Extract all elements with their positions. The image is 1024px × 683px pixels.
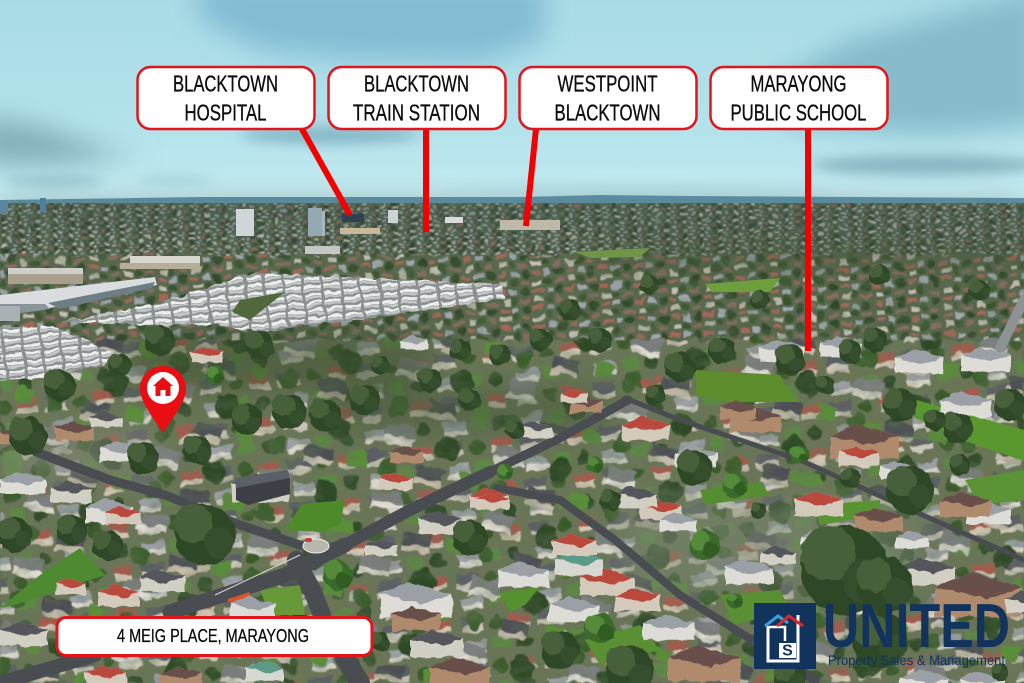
callout: Westpoint Blacktown: BLACKTOWN [554,100,660,126]
leader line: Blacktown Hospital [302,129,350,215]
location pin: red map marker with house icon [140,366,186,433]
callout: Blacktown Hospital [138,67,314,129]
logo: United Property Sales and Management [754,592,1010,669]
callout: Blacktown Train Station: BLACKTOWN [364,70,469,96]
leader line: Blacktown Train Station [423,129,429,232]
logo mark [754,603,816,669]
flats building [235,470,290,505]
background photo: suburban ground [0,203,1024,683]
callout: Blacktown Train Station [328,67,506,129]
callout: Blacktown Hospital: BLACKTOWN [173,70,278,96]
address label [57,618,372,656]
callout: Westpoint Blacktown [520,67,696,129]
city skyline [0,198,560,284]
leader line: Westpoint Blacktown [526,129,536,226]
warehouse and townhouse estate [0,273,505,380]
address label: 4 MEIG PLACE, MARAYONG [117,625,309,646]
green sports fields and lawns [0,248,1024,665]
leader line: Marayong Public School [805,129,811,351]
trees [0,265,1024,683]
background photo: sky [0,0,1024,206]
callout: Blacktown Hospital: HOSPITAL [184,100,266,126]
roundabout [215,538,329,601]
houses [0,336,1024,683]
callout: Westpoint Blacktown: WESTPOINT [558,70,658,96]
callout: Blacktown Train Station: TRAIN STATION [353,100,480,126]
callout: Marayong Public School: PUBLIC SCHOOL [730,100,866,126]
roads [0,300,1024,683]
callout: Marayong Public School [710,67,888,129]
logo mark: S [782,642,793,660]
logo tagline: Property Sales & Management [828,653,1005,668]
callout: Marayong Public School: MARAYONG [750,70,846,96]
